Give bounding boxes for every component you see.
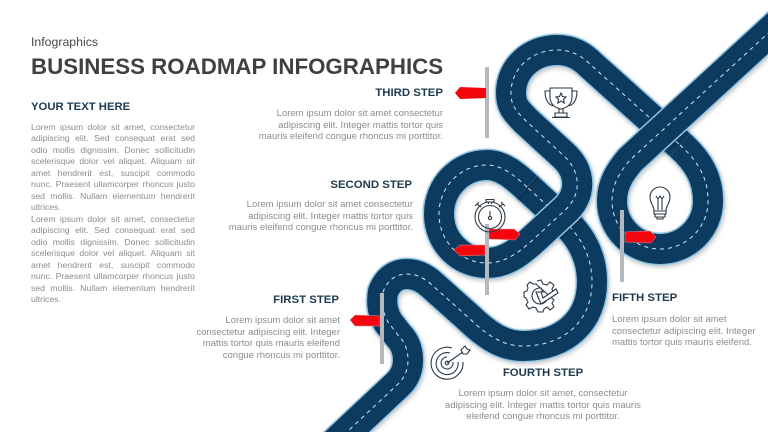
fourth step heading: FOURTH STEP bbox=[503, 367, 583, 379]
left body text: scelerisque dolor vel aliquet. Aliquam sit bbox=[31, 248, 195, 258]
fifth step text: Lorem ipsum dolor sit amet bbox=[612, 314, 727, 325]
signpost: first step bbox=[350, 293, 384, 364]
first step heading: FIRST STEP bbox=[273, 294, 339, 306]
left body text: odio mollis dignissim. Donec sollicitudin bbox=[31, 237, 195, 247]
third step text: mauris eleifend congue rhoncus mi porttitor. bbox=[259, 131, 443, 142]
left body text: Lorem ipsum dolor sit amet, consectetur bbox=[31, 122, 195, 132]
third step text: Lorem ipsum dolor sit amet consectetur bbox=[277, 108, 443, 119]
icon: trophy bbox=[545, 88, 577, 118]
icon: target bbox=[431, 346, 470, 379]
left body text: ultrices. bbox=[31, 294, 61, 304]
subtitle: Infographics bbox=[31, 35, 98, 49]
left body text: adipiscing elit. Sed consequat erat sed bbox=[31, 225, 195, 235]
third step text bbox=[259, 108, 443, 142]
third step text: adipiscing elit. Integer mattis tortor quis bbox=[278, 120, 443, 130]
left body text: ultrices. bbox=[31, 202, 61, 212]
fifth step heading: FIFTH STEP bbox=[612, 292, 677, 304]
first step text: Lorem ipsum dolor sit amet bbox=[225, 315, 340, 326]
fourth step text: Lorem ipsum dolor sit amet, consectetur bbox=[459, 388, 627, 399]
first step text: congue rhoncus mi porttitor. bbox=[223, 350, 340, 360]
fourth step text: eleifend congue rhoncus mi porttitor. bbox=[466, 411, 620, 422]
icon: stopwatch bbox=[475, 200, 505, 232]
fourth step text: adipiscing elit. Integer mattis tortor quis mauris bbox=[445, 400, 641, 410]
title: BUSINESS ROADMAP INFOGRAPHICS bbox=[31, 54, 443, 79]
icon: gear with check bbox=[524, 280, 558, 312]
fourth step text bbox=[445, 388, 641, 422]
left body text: sed mollis. Nullam elementum hendrerit bbox=[31, 283, 195, 293]
left body text: Lorem ipsum dolor sit amet, consectetur bbox=[31, 214, 195, 224]
left body text: amet hendrerit est, suscipit commodo bbox=[31, 260, 195, 270]
second step text: Lorem ipsum dolor sit amet consectetur bbox=[247, 199, 413, 210]
fifth step text: mattis tortor quis mauris eleifend. bbox=[612, 337, 752, 348]
icon: lightbulb bbox=[650, 187, 670, 219]
second step text: adipiscing elit. Integer mattis tortor quis bbox=[248, 210, 413, 222]
first step text: consectetur adipiscing elit. Integer bbox=[196, 326, 340, 338]
left body text: adipiscing elit. Sed consequat erat sed bbox=[31, 133, 195, 143]
road segment: second and third loops bbox=[439, 50, 680, 263]
signpost: fifth step bbox=[620, 210, 656, 282]
second step text: mauris eleifend congue rhoncus mi porttitor. bbox=[229, 222, 413, 233]
left heading: YOUR TEXT HERE bbox=[31, 101, 130, 113]
fifth step text: consectetur adipiscing elit. Integer bbox=[612, 326, 756, 336]
left body text: nunc. Praesent ullamcorper rhoncus justo bbox=[31, 179, 195, 189]
second step heading: SECOND STEP bbox=[330, 179, 412, 191]
left body text: scelerisque dolor vel aliquet. Aliquam sit bbox=[31, 156, 195, 166]
second step text bbox=[229, 199, 413, 233]
road segment: lower curve to crossing bbox=[332, 187, 592, 432]
left body text bbox=[31, 122, 195, 304]
left body text: nunc. Praesent ullamcorper rhoncus justo bbox=[31, 271, 195, 281]
fifth step text bbox=[612, 314, 756, 348]
left body text: odio mollis dignissim. Donec sollicitudin bbox=[31, 145, 195, 155]
signpost: second step bbox=[454, 224, 520, 295]
first step text: mattis tortor quis mauris eleifend bbox=[203, 338, 340, 349]
first step text bbox=[196, 315, 340, 360]
left body text: sed mollis. Nullam elementum hendrerit bbox=[31, 191, 195, 201]
road segment: right loop and exit bbox=[612, 4, 768, 249]
left body text: amet hendrerit est, suscipit commodo bbox=[31, 168, 195, 178]
signpost: third step bbox=[455, 67, 489, 138]
third step heading: THIRD STEP bbox=[375, 87, 443, 99]
